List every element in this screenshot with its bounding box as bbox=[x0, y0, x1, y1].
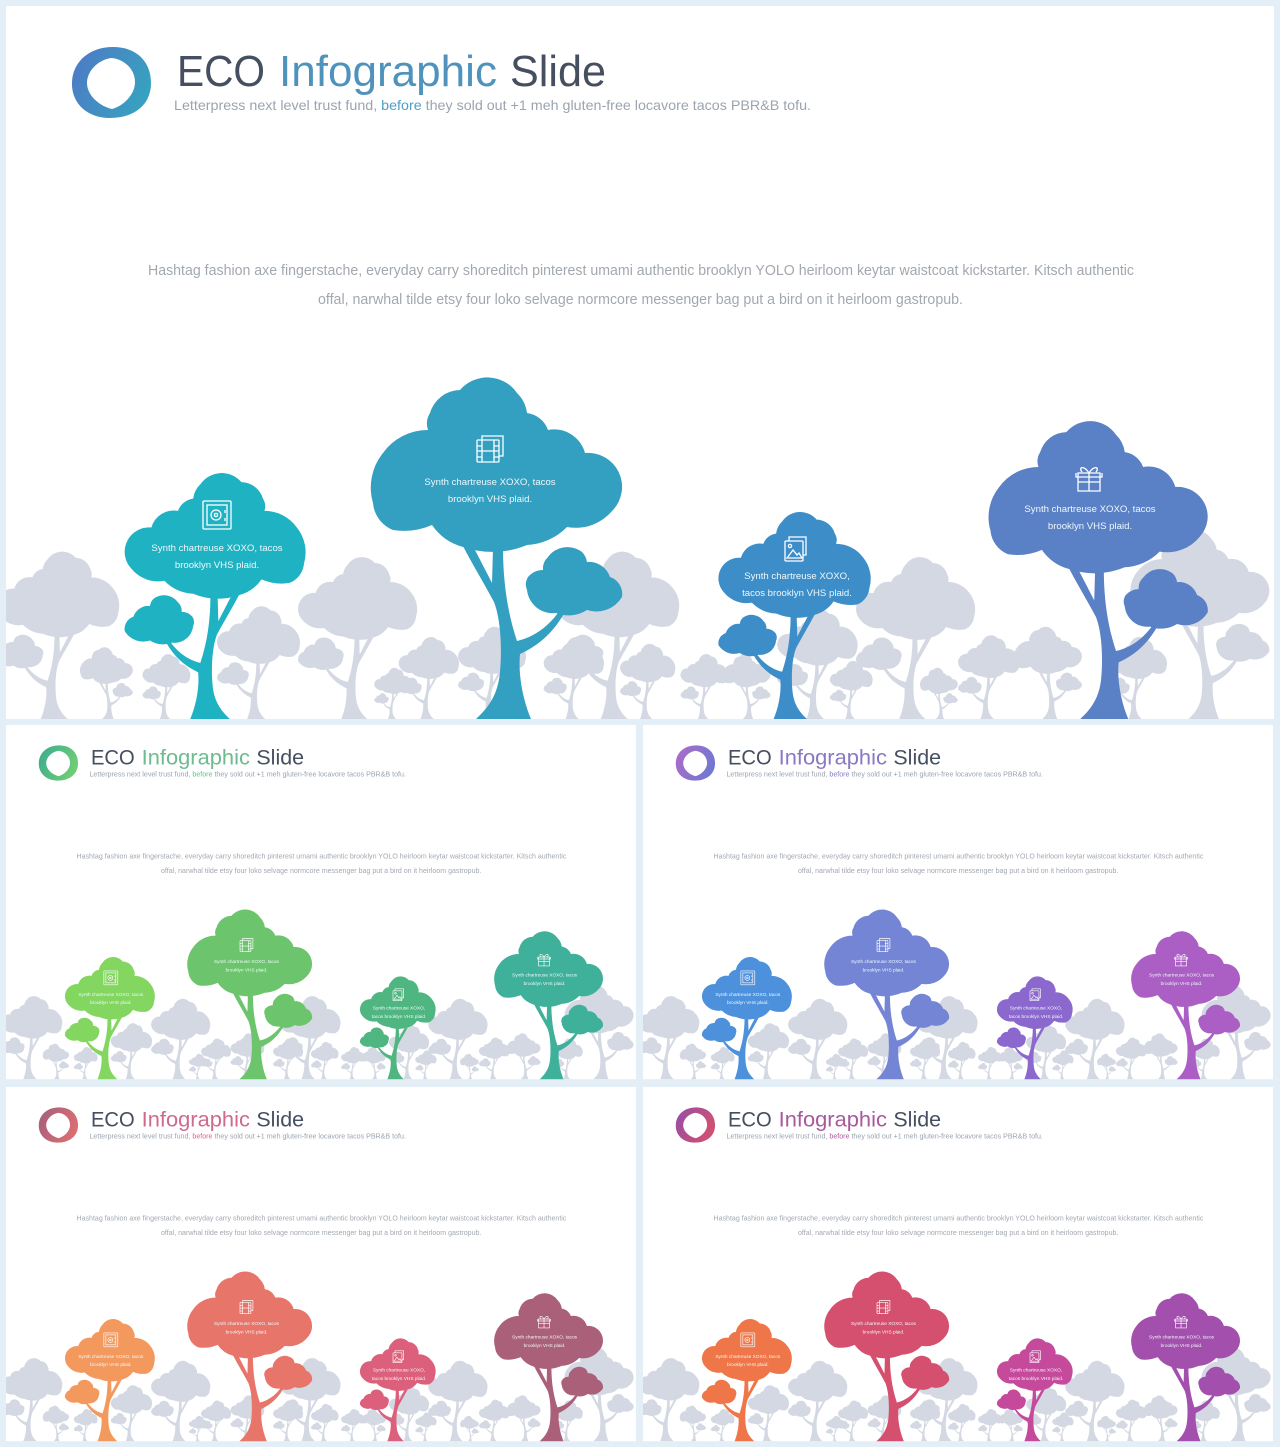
title: Slide bbox=[510, 48, 606, 96]
subtitle: Letterpress next level trust fund, before they sold out +1 meh gluten-free locavore tacos PBR&B tofu. bbox=[726, 772, 1043, 779]
background forest bbox=[1, 1347, 634, 1441]
tree 1 caption: brooklyn VHS plaid. bbox=[727, 1000, 769, 1006]
tree 3 caption: tacos brooklyn VHS plaid. bbox=[372, 1376, 426, 1382]
tree 4 bbox=[989, 421, 1208, 719]
tree 4 caption: brooklyn VHS plaid. bbox=[524, 1343, 565, 1349]
tree 2 caption: brooklyn VHS plaid. bbox=[863, 1329, 904, 1335]
subtitle: Letterpress next level trust fund, before they sold out +1 meh gluten-free locavore tacos PBR&B tofu. bbox=[174, 97, 811, 113]
icon: film frames bbox=[240, 939, 253, 952]
tree 1 caption: Synth chartreuse XOXO, tacos bbox=[151, 543, 283, 554]
icon: picture bbox=[1030, 989, 1040, 1001]
body text: Hashtag fashion axe fingerstache, everyday carry shoreditch pinterest umami authentic brooklyn YOLO heirloom keytar waistcoat kickstarter. Kitsch authentic bbox=[77, 852, 567, 861]
icon: picture bbox=[393, 989, 403, 1001]
tree 1 bbox=[702, 957, 792, 1079]
tree 4 bbox=[1131, 1293, 1240, 1441]
tree 3 caption: Synth chartreuse XOXO, bbox=[373, 1368, 425, 1374]
tree 2 caption: brooklyn VHS plaid. bbox=[448, 494, 532, 505]
body text bbox=[714, 1214, 1204, 1237]
tree 1 caption: Synth chartreuse XOXO, tacos bbox=[78, 992, 144, 998]
body text bbox=[77, 1214, 567, 1237]
title: Infographic bbox=[142, 745, 250, 770]
tree 1 bbox=[65, 1319, 155, 1441]
title: Infographic bbox=[779, 1107, 887, 1132]
tree 3 caption: tacos brooklyn VHS plaid. bbox=[1009, 1014, 1063, 1020]
tree 4 bbox=[494, 1293, 603, 1441]
tree 4 bbox=[494, 931, 603, 1079]
title: ECO bbox=[91, 745, 135, 770]
tree 4 caption: Synth chartreuse XOXO, tacos bbox=[512, 972, 578, 978]
body text bbox=[148, 263, 1134, 308]
body text bbox=[77, 852, 567, 875]
background forest bbox=[0, 530, 1269, 719]
tree 2 bbox=[187, 1272, 312, 1441]
title bbox=[91, 1107, 304, 1132]
logo ring bbox=[676, 1107, 715, 1143]
background forest bbox=[1, 985, 634, 1079]
body text bbox=[714, 852, 1204, 875]
tree 4 caption: brooklyn VHS plaid. bbox=[1048, 521, 1132, 532]
tree 1 caption: Synth chartreuse XOXO, tacos bbox=[715, 1354, 781, 1360]
title: ECO bbox=[91, 1107, 135, 1132]
title: ECO bbox=[728, 1107, 772, 1132]
tree 2 bbox=[824, 910, 949, 1079]
tree 3 caption: Synth chartreuse XOXO, bbox=[373, 1006, 425, 1012]
panel: magenta slide bbox=[638, 1087, 1273, 1441]
tree 1 caption: brooklyn VHS plaid. bbox=[90, 1362, 132, 1368]
tree 2 caption: brooklyn VHS plaid. bbox=[226, 1329, 267, 1335]
tree 1 bbox=[65, 957, 155, 1079]
tree 1 caption: brooklyn VHS plaid. bbox=[90, 1000, 132, 1006]
background forest bbox=[638, 1347, 1271, 1441]
icon: gift bbox=[538, 954, 550, 966]
tree 3 caption: Synth chartreuse XOXO, bbox=[1010, 1368, 1062, 1374]
title bbox=[728, 745, 941, 770]
tree 4 caption: brooklyn VHS plaid. bbox=[1161, 1343, 1202, 1349]
title: Slide bbox=[893, 1107, 941, 1132]
tree 4 caption: Synth chartreuse XOXO, tacos bbox=[1149, 972, 1215, 978]
logo ring bbox=[39, 1107, 78, 1143]
tree 2 bbox=[371, 377, 622, 719]
tree 1 caption: brooklyn VHS plaid. bbox=[727, 1362, 769, 1368]
tree 2 caption: Synth chartreuse XOXO, tacos bbox=[214, 959, 280, 965]
title: Slide bbox=[256, 1107, 304, 1132]
body text: Hashtag fashion axe fingerstache, everyday carry shoreditch pinterest umami authentic brooklyn YOLO heirloom keytar waistcoat kickstarter. Kitsch authentic bbox=[148, 263, 1134, 279]
tree 3 caption: Synth chartreuse XOXO, bbox=[744, 571, 850, 582]
tree 3 caption: tacos brooklyn VHS plaid. bbox=[1009, 1376, 1063, 1382]
body text: Hashtag fashion axe fingerstache, everyday carry shoreditch pinterest umami authentic brooklyn YOLO heirloom keytar waistcoat kickstarter. Kitsch authentic bbox=[77, 1214, 567, 1223]
icon: film frames bbox=[877, 939, 890, 952]
icon: picture bbox=[1030, 1351, 1040, 1363]
tree 2 caption: brooklyn VHS plaid. bbox=[226, 967, 267, 973]
icon: safe bbox=[104, 1333, 118, 1347]
title bbox=[728, 1107, 941, 1132]
icon: safe bbox=[104, 971, 118, 985]
panel: purple slide bbox=[638, 725, 1273, 1079]
subtitle: Letterpress next level trust fund, before they sold out +1 meh gluten-free locavore tacos PBR&B tofu. bbox=[89, 772, 406, 779]
title: Slide bbox=[893, 745, 941, 770]
panel: coral slide bbox=[1, 1087, 636, 1441]
icon: gift bbox=[1076, 468, 1102, 491]
icon: safe bbox=[741, 971, 755, 985]
tree 4 bbox=[1131, 931, 1240, 1079]
icon: film frames bbox=[477, 436, 503, 462]
icon: safe bbox=[203, 501, 231, 529]
subtitle: Letterpress next level trust fund, before they sold out +1 meh gluten-free locavore tacos PBR&B tofu. bbox=[726, 1134, 1043, 1141]
title: Slide bbox=[256, 745, 304, 770]
tree 1 bbox=[125, 473, 306, 719]
tree 1 caption: brooklyn VHS plaid. bbox=[175, 560, 259, 571]
tree 3 caption: tacos brooklyn VHS plaid. bbox=[742, 588, 852, 599]
icon: safe bbox=[741, 1333, 755, 1347]
tree 3 caption: Synth chartreuse XOXO, bbox=[1010, 1006, 1062, 1012]
tree 4 caption: Synth chartreuse XOXO, tacos bbox=[1024, 504, 1156, 515]
tree 4 caption: Synth chartreuse XOXO, tacos bbox=[512, 1334, 578, 1340]
tree 4 caption: brooklyn VHS plaid. bbox=[1161, 981, 1202, 987]
icon: gift bbox=[538, 1316, 550, 1328]
tree 3 bbox=[997, 1338, 1073, 1441]
body text: offal, narwhal tilde etsy four loko selvage normcore messenger bag put a bird on it heirloom gastropub. bbox=[798, 1228, 1118, 1237]
body text: Hashtag fashion axe fingerstache, everyday carry shoreditch pinterest umami authentic brooklyn YOLO heirloom keytar waistcoat kickstarter. Kitsch authentic bbox=[714, 1214, 1204, 1223]
title bbox=[91, 745, 304, 770]
tree 2 bbox=[824, 1272, 949, 1441]
title: Infographic bbox=[779, 745, 887, 770]
background forest bbox=[638, 985, 1271, 1079]
tree 2 caption: Synth chartreuse XOXO, tacos bbox=[851, 959, 917, 965]
tree 2 caption: Synth chartreuse XOXO, tacos bbox=[851, 1321, 917, 1327]
tree 1 bbox=[702, 1319, 792, 1441]
tree 2 bbox=[187, 910, 312, 1079]
tree 2 caption: Synth chartreuse XOXO, tacos bbox=[214, 1321, 280, 1327]
logo ring bbox=[72, 47, 151, 118]
icon: gift bbox=[1175, 1316, 1187, 1328]
tree 3 bbox=[997, 976, 1073, 1079]
tree 2 caption: brooklyn VHS plaid. bbox=[863, 967, 904, 973]
subtitle: Letterpress next level trust fund, before they sold out +1 meh gluten-free locavore tacos PBR&B tofu. bbox=[89, 1134, 406, 1141]
icon: picture bbox=[785, 537, 806, 561]
title: Infographic bbox=[279, 48, 497, 96]
icon: film frames bbox=[240, 1301, 253, 1314]
body text: offal, narwhal tilde etsy four loko selvage normcore messenger bag put a bird on it heirloom gastropub. bbox=[318, 292, 963, 308]
icon: gift bbox=[1175, 954, 1187, 966]
body text: offal, narwhal tilde etsy four loko selvage normcore messenger bag put a bird on it heirloom gastropub. bbox=[798, 866, 1118, 875]
icon: film frames bbox=[877, 1301, 890, 1314]
tree 1 caption: Synth chartreuse XOXO, tacos bbox=[78, 1354, 144, 1360]
icon: picture bbox=[393, 1351, 403, 1363]
tree 3 bbox=[718, 512, 871, 719]
title: Infographic bbox=[142, 1107, 250, 1132]
panel: green slide bbox=[1, 725, 636, 1079]
logo ring bbox=[39, 745, 78, 781]
body text: Hashtag fashion axe fingerstache, everyday carry shoreditch pinterest umami authentic brooklyn YOLO heirloom keytar waistcoat kickstarter. Kitsch authentic bbox=[714, 852, 1204, 861]
title: ECO bbox=[177, 48, 265, 96]
tree 4 caption: Synth chartreuse XOXO, tacos bbox=[1149, 1334, 1215, 1340]
panel: main slide (blue) bbox=[0, 6, 1274, 719]
title: ECO bbox=[728, 745, 772, 770]
body text: offal, narwhal tilde etsy four loko selvage normcore messenger bag put a bird on it heirloom gastropub. bbox=[161, 866, 481, 875]
logo ring bbox=[676, 745, 715, 781]
title bbox=[177, 48, 606, 96]
tree 3 bbox=[360, 976, 436, 1079]
tree 3 bbox=[360, 1338, 436, 1441]
tree 2 caption: Synth chartreuse XOXO, tacos bbox=[424, 477, 556, 488]
tree 4 caption: brooklyn VHS plaid. bbox=[524, 981, 565, 987]
tree 3 caption: tacos brooklyn VHS plaid. bbox=[372, 1014, 426, 1020]
tree 1 caption: Synth chartreuse XOXO, tacos bbox=[715, 992, 781, 998]
body text: offal, narwhal tilde etsy four loko selvage normcore messenger bag put a bird on it heirloom gastropub. bbox=[161, 1228, 481, 1237]
